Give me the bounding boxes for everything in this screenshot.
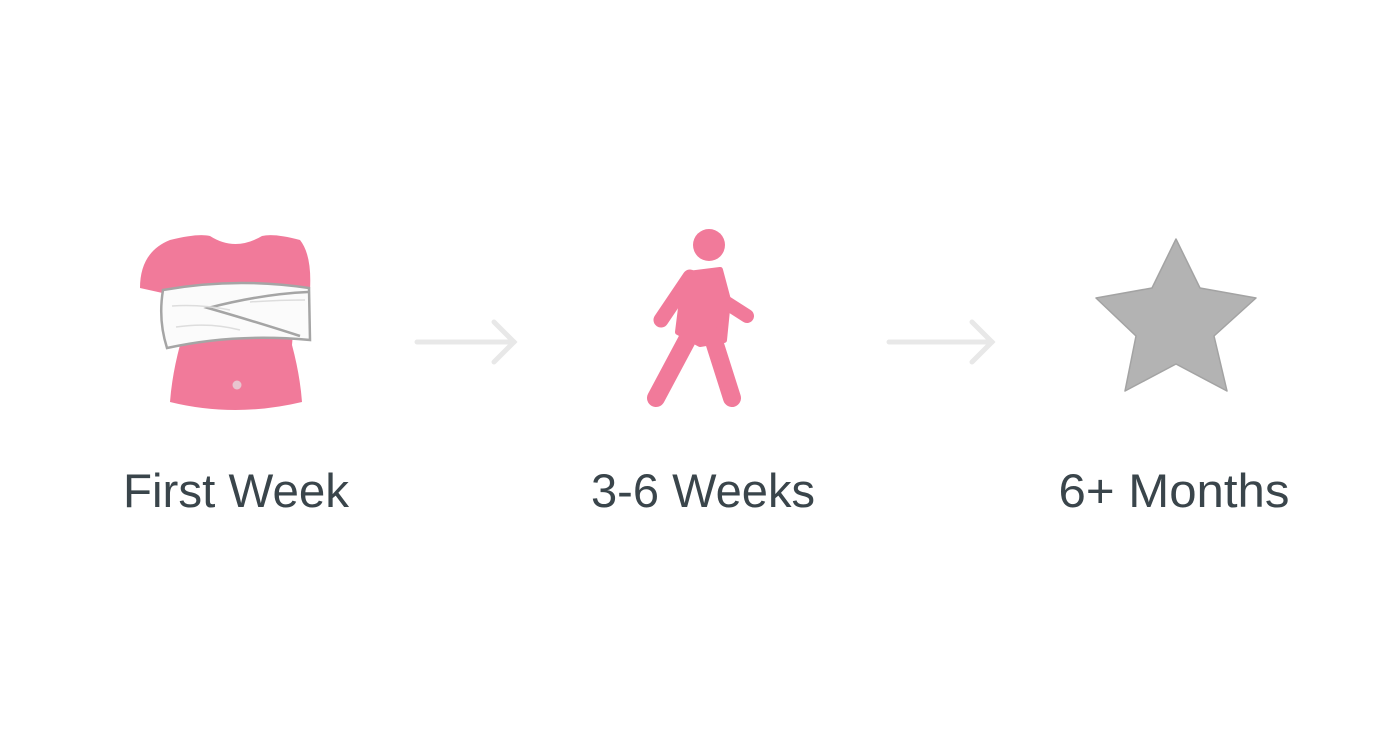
arrow 2: [889, 322, 992, 362]
icon: star: [1096, 239, 1256, 391]
icon: bandaged torso: [140, 235, 310, 410]
label: 3-6 Weeks: 3-6 Weeks: [591, 464, 815, 517]
label: 6+ Months: 6+ Months: [1058, 464, 1290, 517]
label: First Week: First Week: [123, 464, 349, 517]
arrow 1: [417, 322, 514, 362]
icon: walking person: [656, 229, 747, 398]
